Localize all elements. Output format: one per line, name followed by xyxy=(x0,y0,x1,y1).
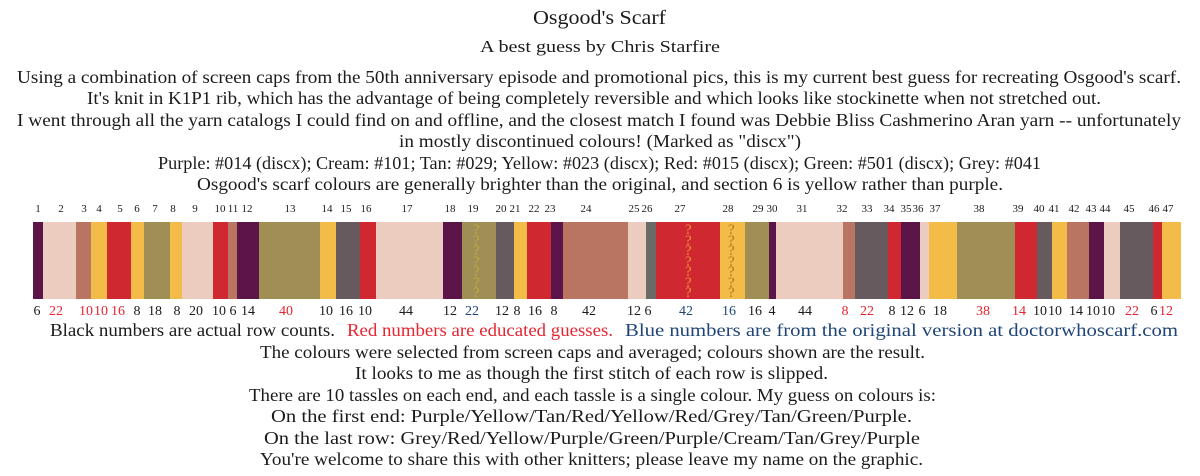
row counts below scarf: 44 xyxy=(399,304,413,319)
section numbers above scarf: 9 xyxy=(192,203,198,215)
row counts below scarf: 8 xyxy=(888,304,896,319)
legend for number colours: Black numbers are actual row counts. xyxy=(50,320,335,340)
row counts below scarf: 8 xyxy=(174,304,180,319)
row counts below scarf: 6 xyxy=(644,304,652,319)
section numbers above scarf: 27 xyxy=(674,203,686,215)
section numbers above scarf: 12 xyxy=(242,203,252,215)
intro text block: Osgood's scarf colours are generally brighter than the original, and section 6 is yellow rather than purple. xyxy=(197,174,1003,194)
row counts below scarf: 12 xyxy=(627,304,641,319)
section numbers above scarf: 3 xyxy=(81,203,87,215)
row counts below scarf: 42 xyxy=(582,304,596,319)
question marks on section 27: ??????? xyxy=(685,222,692,301)
notes text block: It looks to me as though the first stitch of each row is slipped. xyxy=(355,363,828,383)
row counts below scarf: 10 xyxy=(79,304,93,319)
row counts below scarf: 10 xyxy=(319,304,333,319)
row counts below scarf: 14 xyxy=(1012,304,1026,319)
row counts below scarf: 8 xyxy=(514,304,520,319)
row counts below scarf: 22 xyxy=(1125,304,1139,319)
section numbers above scarf: 34 xyxy=(884,203,895,215)
section numbers above scarf: 2 xyxy=(58,203,64,215)
section numbers above scarf: 45 xyxy=(1124,203,1135,215)
row counts below scarf: 12 xyxy=(900,304,914,319)
notes text block: On the last row: Grey/Red/Yellow/Purple/Green/Purple/Cream/Tan/Grey/Purple xyxy=(264,428,920,448)
row counts below scarf: 18 xyxy=(933,304,947,319)
section numbers above scarf: 32 xyxy=(836,203,848,215)
row counts below scarf: 10 xyxy=(212,304,226,319)
section numbers above scarf: 26 xyxy=(642,203,653,215)
notes text block: You're welcome to share this with other knitters; please leave my name on the graphic. xyxy=(260,449,923,469)
section numbers above scarf: 46 xyxy=(1148,203,1160,215)
section numbers above scarf: 18 xyxy=(444,203,456,215)
row counts below scarf: 10 xyxy=(1101,304,1115,319)
row counts below scarf: 10 xyxy=(358,304,372,319)
row counts below scarf: 14 xyxy=(1069,304,1083,319)
section numbers above scarf: 4 xyxy=(96,203,102,215)
title: Osgood's Scarf xyxy=(533,7,666,29)
row counts below scarf: 8 xyxy=(134,304,140,319)
intro text block xyxy=(17,67,1181,194)
intro text block: Using a combination of screen caps from the 50th anniversary episode and promotional pics, this is my current best guess for recreating Osgood's scarf. xyxy=(17,67,1181,87)
row counts below scarf: 40 xyxy=(279,304,293,319)
row counts below scarf: 44 xyxy=(798,304,812,319)
section numbers above scarf: 21 xyxy=(510,203,520,215)
section numbers above scarf: 40 xyxy=(1034,203,1045,215)
notes text block: On the first end: Purple/Yellow/Tan/Red/Yellow/Red/Grey/Tan/Green/Purple. xyxy=(271,406,912,426)
section numbers above scarf: 31 xyxy=(796,203,808,215)
section numbers above scarf: 10 xyxy=(214,203,226,215)
section numbers above scarf: 33 xyxy=(862,203,873,215)
row counts below scarf: 12 xyxy=(495,304,509,319)
question marks on section 28: ??????? xyxy=(728,222,735,301)
notes text block xyxy=(249,342,936,469)
section numbers above scarf: 8 xyxy=(170,203,176,215)
section numbers above scarf: 36 xyxy=(912,203,924,215)
row counts below scarf: 20 xyxy=(189,304,203,319)
intro text block: It's knit in K1P1 rib, which has the advantage of being completely reversible and which looks like stockinette when not stretched out. xyxy=(87,88,1101,108)
row counts below scarf: 10 xyxy=(1086,304,1100,319)
scarf stripes xyxy=(33,222,1181,299)
notes text block: The colours were selected from screen caps and averaged; colours shown are the result. xyxy=(260,342,925,362)
section numbers above scarf: 47 xyxy=(1162,203,1174,215)
section numbers above scarf: 11 xyxy=(228,203,238,215)
section numbers above scarf: 15 xyxy=(340,203,352,215)
row counts below scarf: 22 xyxy=(49,304,63,319)
row counts below scarf: 10 xyxy=(1048,304,1062,319)
section numbers above scarf: 37 xyxy=(930,203,941,215)
row counts below scarf: 18 xyxy=(148,304,162,319)
legend for number colours: Red numbers are educated guesses. xyxy=(347,320,613,340)
intro text block: in mostly discontinued colours! (Marked as "discx") xyxy=(399,131,801,152)
row counts below scarf xyxy=(34,304,1173,319)
section numbers above scarf: 43 xyxy=(1086,203,1097,215)
section numbers above scarf: 29 xyxy=(752,203,764,215)
section numbers above scarf: 6 xyxy=(134,203,140,215)
section numbers above scarf: 13 xyxy=(284,203,296,215)
row counts below scarf: 6 xyxy=(1150,304,1158,319)
row counts below scarf: 6 xyxy=(230,304,236,319)
row counts below scarf: 8 xyxy=(842,304,848,319)
section numbers above scarf: 7 xyxy=(152,203,158,215)
section numbers above scarf: 42 xyxy=(1068,203,1080,215)
legend for number colours: Blue numbers are from the original version at doctorwhoscarf.com xyxy=(625,320,1178,340)
section numbers above scarf: 28 xyxy=(722,203,734,215)
section numbers above scarf: 17 xyxy=(402,203,413,215)
intro text block: Purple: #014 (discx); Cream: #101; Tan: #029; Yellow: #023 (discx); Red: #015 (discx); Green: #501 (discx); Grey: #041 xyxy=(158,153,1041,174)
section numbers above scarf: 19 xyxy=(468,203,479,215)
section numbers above scarf: 14 xyxy=(322,203,333,215)
section numbers above scarf: 30 xyxy=(766,203,778,215)
row counts below scarf: 10 xyxy=(94,304,108,319)
row counts below scarf: 6 xyxy=(34,304,40,319)
row counts below scarf: 8 xyxy=(550,304,558,319)
section numbers above scarf: 35 xyxy=(900,203,912,215)
notes text block: There are 10 tassles on each end, and each tassle is a single colour. My guess on colours is: xyxy=(249,385,936,405)
row counts below scarf: 6 xyxy=(918,304,926,319)
section numbers above scarf: 25 xyxy=(628,203,640,215)
section numbers above scarf: 5 xyxy=(117,203,123,215)
section numbers above scarf: 20 xyxy=(496,203,507,215)
row counts below scarf: 38 xyxy=(976,304,990,319)
section numbers above scarf: 23 xyxy=(544,203,556,215)
row counts below scarf: 16 xyxy=(528,304,542,319)
row counts below scarf: 12 xyxy=(443,304,457,319)
section numbers above scarf: 24 xyxy=(580,203,592,215)
row counts below scarf: 22 xyxy=(860,304,874,319)
row counts below scarf: 22 xyxy=(465,304,479,319)
intro text block: I went through all the yarn catalogs I could find on and offline, and the closest match I found was Debbie Bliss Cashmerino Aran yarn -- unfortunately xyxy=(17,110,1181,130)
section numbers above scarf: 22 xyxy=(528,203,540,215)
row counts below scarf: 4 xyxy=(768,304,776,319)
section numbers above scarf: 44 xyxy=(1100,203,1111,215)
row counts below scarf: 42 xyxy=(679,304,693,319)
row counts below scarf: 14 xyxy=(241,304,255,319)
section numbers above scarf xyxy=(35,203,1174,215)
section numbers above scarf: 41 xyxy=(1048,203,1060,215)
section numbers above scarf: 1 xyxy=(35,203,41,215)
row counts below scarf: 16 xyxy=(748,304,762,319)
question marks on section 19: ??????? xyxy=(473,222,480,301)
section numbers above scarf: 39 xyxy=(1012,203,1024,215)
subtitle: A best guess by Chris Starfire xyxy=(480,37,720,56)
row counts below scarf: 16 xyxy=(722,304,736,319)
section numbers above scarf: 38 xyxy=(974,203,985,215)
row counts below scarf: 16 xyxy=(339,304,353,319)
row counts below scarf: 12 xyxy=(1159,304,1173,319)
legend for number colours xyxy=(50,320,1178,340)
row counts below scarf: 10 xyxy=(1033,304,1047,319)
row counts below scarf: 16 xyxy=(111,304,125,319)
section numbers above scarf: 16 xyxy=(360,203,372,215)
